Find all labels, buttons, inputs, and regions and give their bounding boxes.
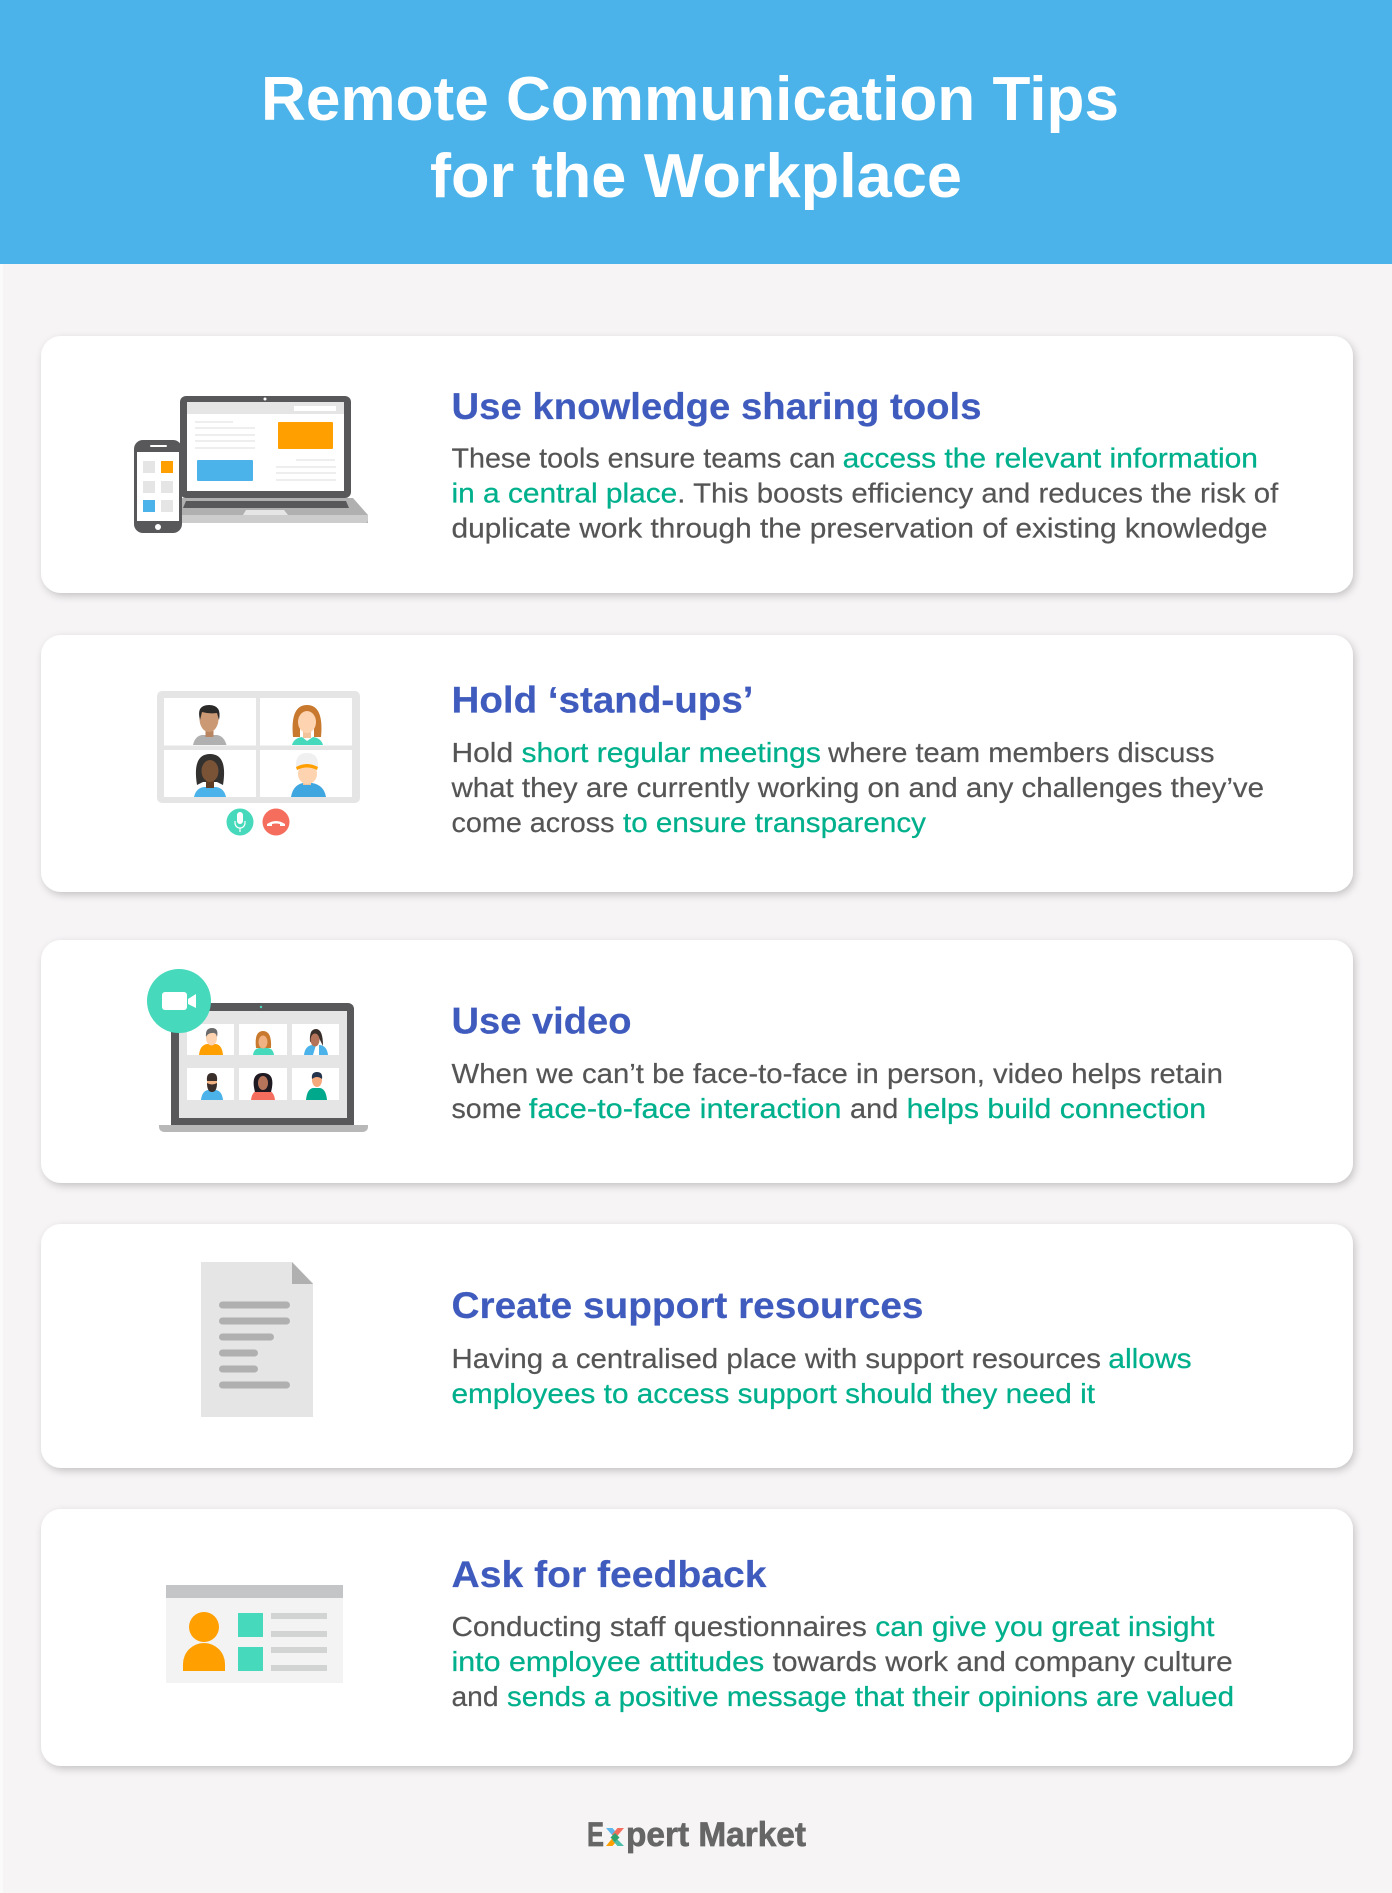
heading: Hold ‘stand-ups’ (452, 679, 754, 720)
heading: Use knowledge sharing tools (452, 386, 982, 427)
heading: Create support resources (452, 1285, 924, 1326)
body text: short regular meetings (522, 737, 821, 768)
heading: Use video (452, 1000, 632, 1041)
body text: allows (1108, 1343, 1192, 1374)
body text: and (850, 1093, 898, 1124)
body text: When we can’t be face-to-face in person, video helps retain (452, 1058, 1223, 1089)
panel: use video (41, 940, 1353, 1183)
body text: access the relevant information (843, 442, 1258, 473)
body text: where team members discuss (827, 737, 1214, 768)
header banner (0, 0, 1392, 264)
icon: video camera badge (147, 969, 211, 1033)
icon: questionnaire (166, 1585, 343, 1683)
panel: support resources (41, 1224, 1353, 1468)
body text: employees to access support should they need it (452, 1378, 1095, 1409)
body text (450, 737, 1264, 838)
icon: video call grid (157, 691, 360, 836)
body text: Hold (452, 737, 513, 768)
body text: what they are currently working on and any challenges they’ve (450, 772, 1264, 803)
body text: These tools ensure teams can (452, 442, 836, 473)
body text: sends a positive message that their opinions are valued (507, 1681, 1234, 1712)
body text: Having a centralised place with support resources (452, 1343, 1101, 1374)
icon: document (201, 1262, 313, 1417)
icon: microphone button (226, 808, 254, 836)
panel: knowledge sharing tools (41, 336, 1353, 593)
body text: . This boosts efficiency and reduces the risk of (677, 477, 1279, 508)
panel: stand-ups (41, 635, 1353, 892)
title (261, 65, 1119, 211)
title: for the Workplace (430, 142, 962, 211)
body text: face-to-face interaction (529, 1093, 842, 1124)
panel: ask for feedback (41, 1509, 1353, 1766)
body text: into employee attitudes (452, 1646, 764, 1677)
body text: helps build connection (907, 1093, 1206, 1124)
body text (452, 1343, 1192, 1409)
body text: some (452, 1093, 522, 1124)
body text: duplicate work through the preservation of existing knowledge (452, 512, 1268, 543)
icon: hang up button (262, 808, 290, 836)
body text (452, 1611, 1234, 1712)
body text: in a central place (452, 477, 677, 508)
body text: to ensure transparency (623, 807, 926, 838)
logo: Expert Market: E (587, 1816, 604, 1854)
body text: come across (452, 807, 614, 838)
body text: Conducting staff questionnaires (452, 1611, 867, 1642)
body text: towards work and company culture (773, 1646, 1233, 1677)
icon: laptop and phone (134, 396, 368, 533)
heading: Ask for feedback (452, 1554, 767, 1595)
icon: laptop with video call (147, 969, 368, 1132)
body text (452, 442, 1279, 543)
body text (452, 1058, 1223, 1124)
body text: can give you great insight (875, 1611, 1215, 1642)
title: Remote Communication Tips (261, 65, 1119, 134)
logo: Expert Market: pert Market (626, 1816, 806, 1854)
body text: and (452, 1681, 498, 1712)
logo: Expert Market: x (605, 1816, 624, 1854)
